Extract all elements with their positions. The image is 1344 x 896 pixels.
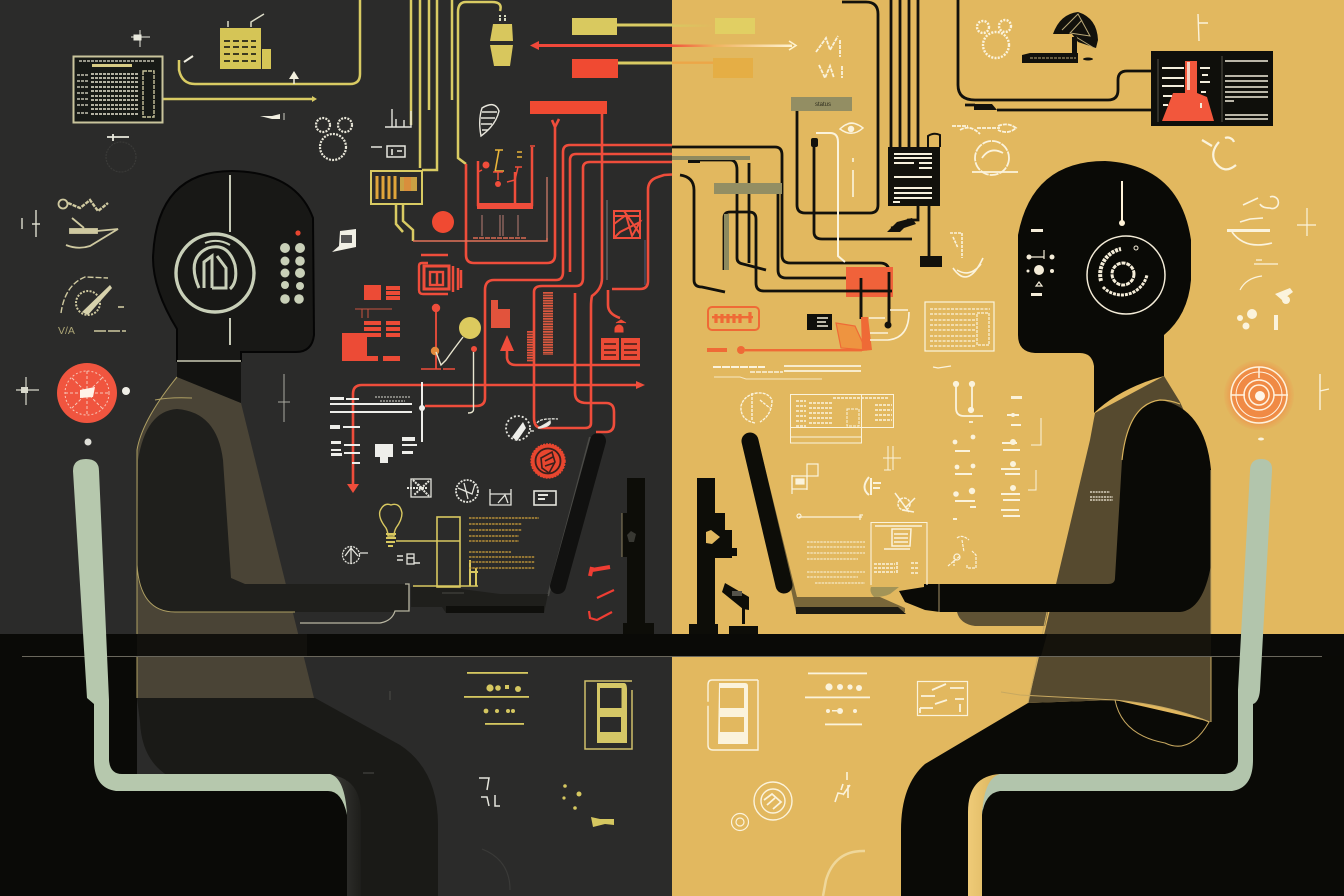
icon: yellow dots cluster	[562, 784, 614, 827]
icon: gear chain top	[316, 118, 352, 160]
shirt seen through the table: left	[137, 634, 307, 656]
head centre line	[229, 175, 231, 345]
icon: concentric red chip	[419, 255, 461, 294]
circuit: red wires	[353, 114, 672, 487]
panel: dark left background	[0, 0, 672, 896]
orange timeline	[707, 346, 862, 354]
arrow: red left section	[530, 41, 672, 50]
icon: small ring badge	[732, 814, 748, 830]
icon: mini bar skyline	[385, 109, 411, 127]
floor shadow: under seat	[0, 780, 347, 896]
neck: left	[177, 325, 241, 403]
tick near wire start	[184, 56, 193, 62]
icon: small white rect table lower right	[918, 682, 968, 716]
icon: flag cards	[792, 464, 818, 494]
icon: orange connector chip	[708, 307, 759, 330]
shoulder outline: right	[1122, 400, 1180, 460]
block of tiny text: left laptop	[469, 518, 539, 568]
icon: black machine	[920, 256, 942, 267]
head antenna	[1119, 181, 1125, 226]
pale yellow bar: top right	[715, 18, 755, 34]
terminal cap	[811, 138, 818, 147]
screen cable group: black wires	[672, 0, 1151, 325]
icon: black step device	[887, 218, 916, 232]
lower list: left	[464, 672, 529, 725]
arm: right	[940, 400, 1211, 612]
icon: small pin left	[107, 134, 129, 141]
chair frame: right	[982, 459, 1272, 815]
icon: tiny splash	[895, 493, 915, 512]
icon: white gears top right	[977, 20, 1011, 58]
icon: white boat right	[1227, 196, 1278, 245]
stand: right	[689, 478, 758, 634]
figure: left seated person	[137, 171, 438, 896]
icon: document left	[74, 56, 162, 122]
icon: yellow building	[220, 14, 271, 69]
glyph column right	[1001, 396, 1022, 517]
icon: black document	[888, 134, 940, 206]
shirt tail under forearm	[957, 612, 1048, 626]
seat edge: left	[330, 775, 361, 896]
table	[0, 634, 1344, 656]
neck seam	[177, 360, 241, 362]
icon: yellow tablet	[585, 681, 632, 749]
orange beaker	[836, 317, 872, 351]
khaki bar with label: status	[815, 102, 831, 108]
red circle node	[432, 211, 454, 233]
icon: white shell	[480, 105, 499, 136]
small arrow marker	[289, 71, 299, 79]
icon: head dial right	[1087, 236, 1165, 314]
small ghost marks	[363, 691, 390, 773]
wire terminal dot	[884, 322, 892, 328]
laptop hinge shadow	[757, 435, 905, 612]
small chest text	[1090, 492, 1113, 500]
tiny text block: right laptop	[807, 542, 865, 583]
wires over orange block	[846, 272, 892, 325]
orange block	[846, 267, 893, 297]
icon: crosshair left lower	[16, 377, 39, 405]
icon: eye glyph	[840, 123, 863, 133]
small dot right	[1258, 438, 1264, 440]
icon: head button grid	[280, 230, 305, 304]
icon: white tablet	[708, 680, 758, 750]
figure: right seated person	[899, 161, 1344, 896]
vertical tick marks by shoulder	[1028, 418, 1041, 490]
badge: red stamp	[531, 444, 565, 478]
khaki bar middle	[714, 183, 782, 194]
icon: wide table card	[790, 394, 894, 443]
small white pin	[260, 113, 284, 120]
shirt: left	[137, 377, 314, 698]
icon: half dome	[864, 477, 881, 495]
faint arc lower left	[482, 849, 510, 890]
yellow cup icon	[490, 15, 513, 66]
icon: tool sketches top right	[952, 124, 1018, 175]
laptop shadow line	[548, 437, 590, 596]
icon: dial gauge left	[61, 277, 126, 331]
crosshair block	[21, 387, 28, 393]
laptop screen	[750, 441, 784, 585]
icon: scribble white A	[816, 36, 842, 78]
icon: right crosshair	[1297, 208, 1316, 236]
cross near top	[1198, 14, 1208, 41]
icon: red network tile	[614, 211, 640, 238]
arrow head: downward red	[347, 484, 359, 493]
icon: hash glyph	[883, 446, 901, 470]
outline: shoulder and arm	[137, 377, 295, 698]
icon: light bulb	[380, 504, 402, 546]
khaki vertical	[724, 214, 729, 270]
icon: small cross top left	[131, 30, 150, 47]
icon: head dial	[176, 234, 254, 312]
pale crescent	[823, 851, 865, 896]
circuit: yellow wires	[163, 0, 672, 241]
icon: white bird ring top right	[1202, 138, 1236, 169]
icon: dome	[1022, 12, 1098, 63]
touch mark	[442, 592, 464, 594]
laptop keyboard	[446, 606, 544, 613]
icon: faint circle	[106, 142, 136, 172]
icon: flower cluster right	[1237, 288, 1293, 330]
head: left robot	[153, 171, 314, 361]
icon: white brain	[741, 393, 772, 423]
arrow head: horizontal red	[636, 381, 645, 389]
khaki thin bar	[672, 156, 750, 160]
seat edge: right	[968, 774, 1000, 896]
shirt: right	[1028, 376, 1211, 722]
laptop screen	[558, 441, 598, 586]
yellow frame with connector	[396, 517, 478, 587]
yellow bar: top	[572, 18, 617, 35]
hatched red columns	[491, 292, 548, 362]
laptop keyboard	[796, 607, 906, 614]
laptop: right	[750, 435, 906, 614]
icon: tree sketch left	[58, 200, 118, 248]
icon: mini card	[371, 146, 405, 157]
arrow: fading right section	[672, 41, 796, 50]
table underline	[22, 656, 1322, 658]
red bar: middle	[572, 59, 618, 78]
icon: scribble lower right	[835, 772, 850, 802]
icon: framed note	[871, 522, 927, 585]
thin cross beside neck	[278, 374, 290, 422]
chair: right	[968, 459, 1272, 896]
orange wire continuation over gold	[672, 62, 714, 64]
icon: head node cluster	[1026, 229, 1054, 296]
chair frame: left	[73, 459, 347, 815]
white dot	[122, 387, 130, 395]
stand knob	[706, 530, 720, 544]
stand: left	[622, 478, 654, 634]
icon: small crosshair left	[22, 210, 40, 237]
laptop: left	[411, 437, 598, 613]
laptop base and hand	[411, 587, 548, 613]
cuff mark: right	[938, 584, 940, 612]
amber bar: middle right	[713, 58, 753, 78]
icon: monitor base	[974, 104, 997, 110]
stand knob	[627, 531, 636, 542]
neck and head: right	[1018, 161, 1191, 413]
lower body: right	[901, 634, 1344, 896]
red header bar	[530, 101, 607, 114]
red paired document	[601, 320, 640, 360]
red zigzag glyphs	[589, 567, 614, 620]
icon: black mini chip	[807, 314, 832, 330]
yellow wire continuation over gold	[672, 24, 715, 27]
lower list: right	[805, 672, 870, 725]
icon: black screen with red chart	[1151, 51, 1273, 126]
belly outline: right	[1001, 470, 1211, 746]
icon: ringed hand badge	[754, 782, 792, 820]
arrow head: yellow	[312, 96, 317, 102]
thin vertical white marks	[852, 158, 854, 197]
marker line	[293, 79, 295, 84]
icon: table card right	[925, 302, 994, 351]
slider knob	[797, 514, 801, 518]
arm: left	[137, 409, 409, 612]
icon: white mini trees	[950, 233, 983, 277]
cuff: left	[300, 584, 409, 623]
small splat	[84, 438, 92, 446]
lollipop chart	[421, 304, 481, 413]
icon: orange glowing rings	[1224, 360, 1294, 430]
right crosshair lower	[1320, 374, 1329, 410]
floor shadow: left of chair	[0, 634, 137, 896]
label: V/A: V/A	[58, 325, 75, 337]
triangle marker	[500, 335, 514, 351]
shirt seen through the table: right	[1041, 634, 1211, 656]
hand: right	[899, 584, 940, 612]
icon: tiny glyph lower left	[479, 778, 500, 806]
leg: left	[137, 698, 438, 896]
wire white	[816, 133, 845, 262]
white label bars and vertical marker	[330, 382, 425, 464]
wire terminal block	[688, 158, 700, 163]
icon: white tube curve	[869, 310, 909, 340]
chair: left	[73, 459, 361, 896]
stand highlight	[621, 513, 623, 557]
panel: golden right background	[672, 0, 1344, 896]
icon: little people glyph	[948, 536, 976, 568]
icon: red blocks stack	[342, 285, 400, 361]
white label lines	[713, 366, 951, 379]
icon: white card with chart	[332, 229, 356, 252]
icon: red radar circle	[57, 363, 117, 423]
glyph column left	[953, 435, 976, 520]
icon: slider line	[799, 515, 863, 520]
icon: yellow bar gauge	[371, 171, 422, 204]
icon: right small arcs	[1240, 260, 1278, 290]
icon: U shaped glyph	[954, 382, 983, 422]
small chart marks	[473, 146, 645, 285]
hand highlight	[870, 587, 899, 597]
icon row: white small sketches	[342, 416, 558, 564]
desk lamp device	[722, 583, 758, 634]
khaki bar with label	[791, 97, 852, 111]
